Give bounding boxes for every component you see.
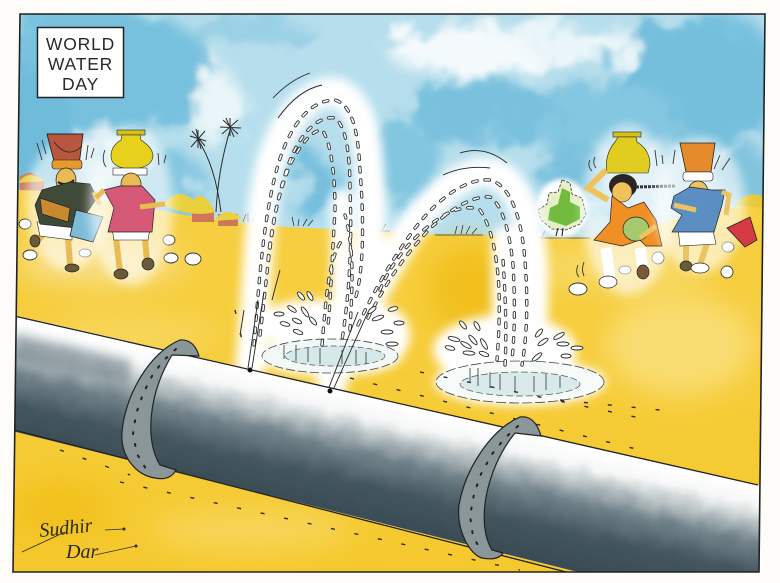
sign: World Water Day: WATER [48, 54, 113, 74]
splash droplets 1 [274, 291, 404, 346]
legs [686, 240, 708, 265]
pot [613, 132, 641, 137]
dress [594, 196, 662, 246]
hair and braid [609, 174, 637, 198]
bucket on head [47, 134, 83, 165]
dhoti [678, 226, 716, 246]
bucket on head [680, 143, 715, 172]
rocks [19, 219, 734, 295]
leak holes [248, 368, 332, 394]
sign: World Water Day: WORLD [46, 34, 115, 54]
hut left [18, 172, 45, 191]
shirt [671, 187, 725, 232]
green pot [623, 217, 649, 241]
sky [18, 14, 764, 238]
woman with yellow pot [582, 125, 675, 295]
legs [606, 248, 643, 278]
pipe [16, 316, 760, 572]
puddle 2 [436, 361, 604, 403]
flange 2 [459, 417, 541, 559]
pipe outlines [14, 316, 758, 573]
signature [22, 514, 138, 563]
dhoti [112, 232, 150, 240]
ground [10, 190, 770, 575]
legs [36, 232, 70, 265]
dhoti [37, 222, 72, 240]
jet source lines [240, 73, 507, 390]
water halos [250, 92, 606, 406]
dashes on ground near pipe [60, 310, 660, 570]
red pail [727, 217, 757, 247]
tree [536, 179, 588, 237]
sign: World Water Day: DAY [62, 74, 99, 94]
signature: Sudhir [38, 514, 94, 542]
motion lines [37, 140, 730, 277]
grass tufts [243, 213, 590, 238]
man with red-brown bucket and blue pail [26, 134, 110, 272]
splash droplets 2 [445, 320, 583, 362]
hut right [735, 194, 762, 208]
shirt [104, 186, 155, 232]
water jet 1 droplets [254, 100, 363, 345]
water jet 2 droplets [358, 180, 527, 365]
legs [116, 238, 147, 272]
thatched huts [18, 172, 762, 226]
man with orange bucket and red pail [655, 137, 757, 273]
blue pail [70, 210, 103, 242]
pipe left-end shading [14, 333, 130, 385]
sign: World Water Day [38, 28, 124, 98]
flange 1 [122, 340, 199, 479]
puddle 1 [262, 339, 398, 373]
shirt [35, 182, 97, 228]
palm trees [190, 118, 241, 212]
pouch [40, 198, 70, 222]
hut cluster [163, 194, 243, 226]
signature: Dar [65, 541, 98, 563]
man with yellow pot [89, 125, 173, 285]
pot [117, 130, 145, 135]
